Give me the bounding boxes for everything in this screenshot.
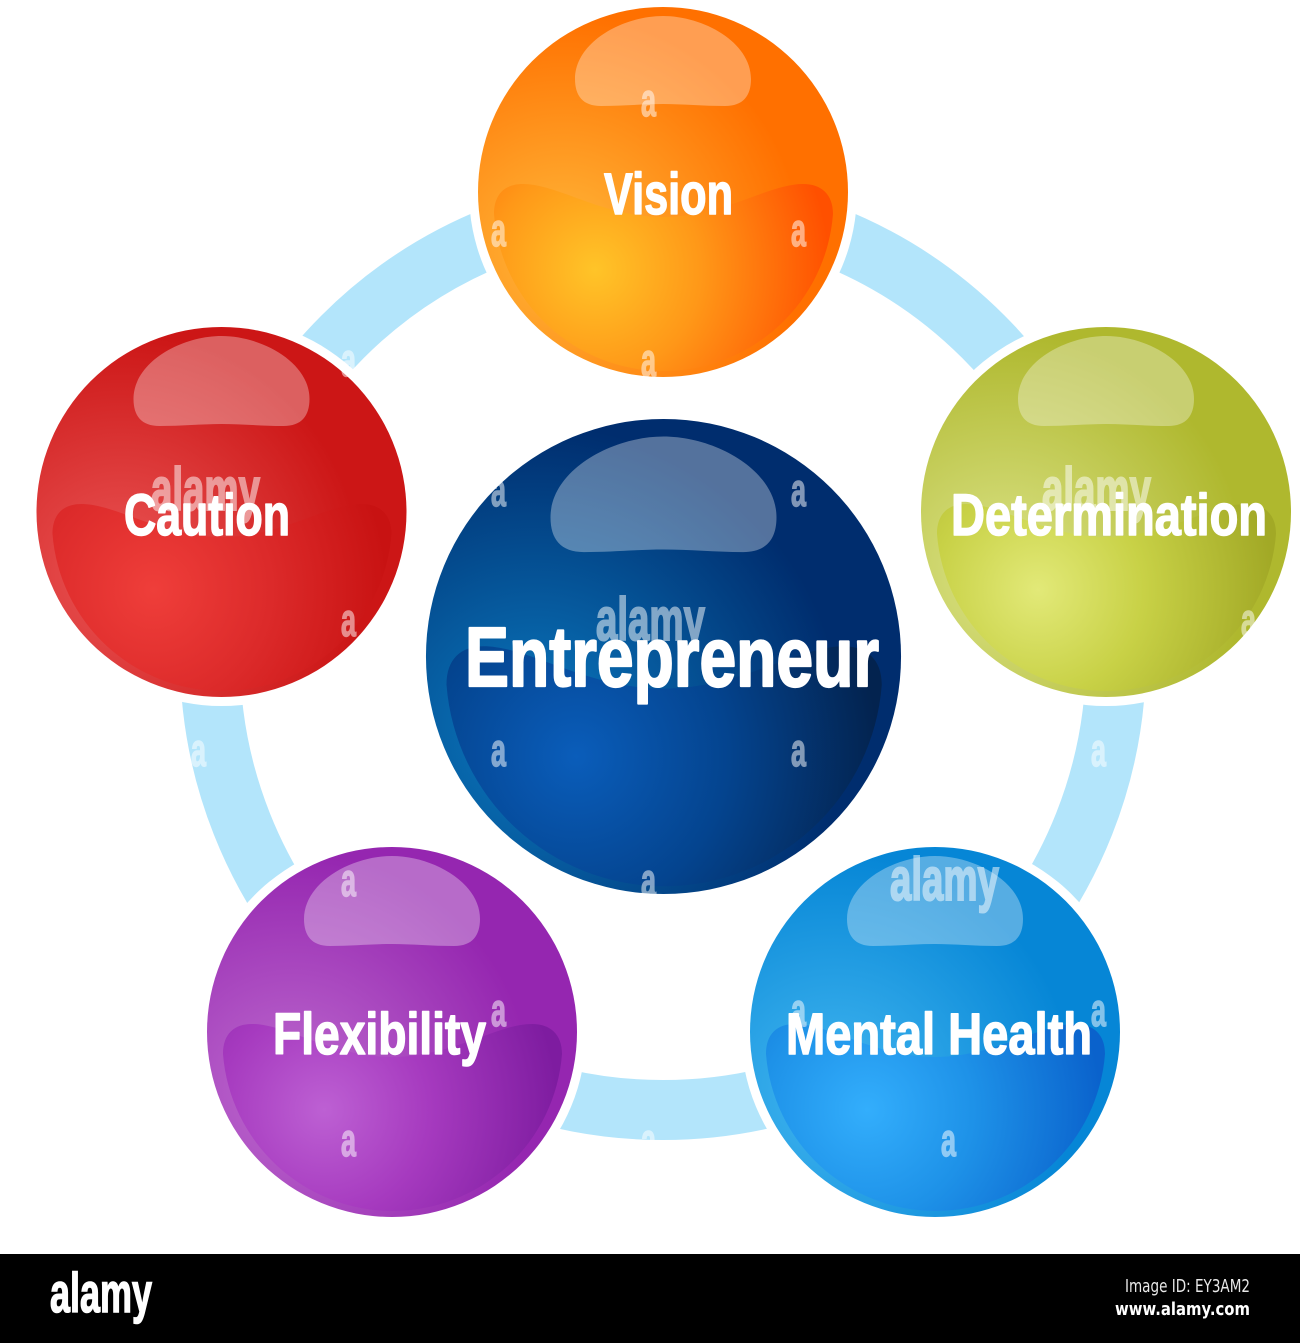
central sphere: Entrepreneur	[426, 419, 901, 894]
watermark: a	[791, 464, 806, 516]
sphere: Flexibility	[198, 838, 586, 1226]
Vision lower reflection	[494, 184, 833, 371]
sphere: Caution	[28, 318, 416, 706]
website: www.alamy.com	[1115, 1299, 1250, 1320]
sphere: Vision	[469, 0, 857, 386]
watermark: a	[641, 854, 656, 906]
watermark: a	[941, 1114, 956, 1166]
watermark: a	[791, 724, 806, 776]
Flexibility top highlight	[304, 856, 480, 946]
Vision top highlight	[575, 16, 751, 106]
watermark: a	[641, 334, 656, 386]
watermark: a	[341, 334, 356, 386]
Entrepreneur label: Entrepreneur	[465, 610, 879, 704]
Mental Health top highlight	[847, 856, 1023, 946]
watermark: a	[491, 464, 506, 516]
Caution sphere base	[36, 327, 406, 697]
watermark: a	[341, 594, 356, 646]
Vision label: Vision	[604, 162, 733, 227]
footer logo: alamy	[50, 1261, 152, 1324]
watermark: a	[491, 204, 506, 256]
watermark: alamy	[596, 586, 705, 653]
watermark: a	[641, 1114, 656, 1166]
sphere: Mental Health	[741, 838, 1129, 1226]
Determination sphere base	[921, 327, 1291, 697]
Vision sphere base	[478, 7, 848, 377]
Mental Health lower reflection	[766, 1024, 1105, 1211]
watermark: a	[791, 204, 806, 256]
watermark: alamy	[151, 456, 260, 523]
Flexibility lower reflection	[223, 1024, 562, 1211]
Determination top highlight	[1018, 336, 1194, 426]
connecting ring	[210, 204, 1116, 1110]
image id: Image ID: EY3AM2	[1125, 1276, 1250, 1297]
watermark: a	[491, 724, 506, 776]
Caution top highlight	[134, 336, 310, 426]
Entrepreneur sphere base	[426, 419, 901, 894]
Mental Health label: Mental Health	[786, 1002, 1092, 1067]
watermark: a	[791, 984, 806, 1036]
watermark	[151, 74, 1256, 1166]
watermark: a	[1241, 594, 1256, 646]
Flexibility sphere base	[207, 847, 577, 1217]
Mental Health sphere base	[750, 847, 1120, 1217]
Caution lower reflection	[52, 504, 392, 691]
Entrepreneur top highlight	[551, 437, 776, 552]
watermark: alamy	[890, 846, 999, 913]
watermark: a	[1091, 724, 1106, 776]
watermark: a	[1091, 984, 1106, 1036]
Caution label: Caution	[124, 483, 290, 548]
watermark: alamy	[1042, 456, 1151, 523]
Flexibility label: Flexibility	[273, 1002, 486, 1067]
footer bar	[0, 1254, 1300, 1343]
Determination lower reflection	[937, 504, 1276, 691]
watermark: a	[191, 724, 206, 776]
watermark: a	[641, 74, 656, 126]
sphere: Determination	[912, 318, 1300, 706]
watermark: a	[491, 984, 506, 1036]
watermark: a	[341, 1114, 356, 1166]
watermark: a	[341, 854, 356, 906]
Entrepreneur lower reflection	[447, 646, 882, 886]
